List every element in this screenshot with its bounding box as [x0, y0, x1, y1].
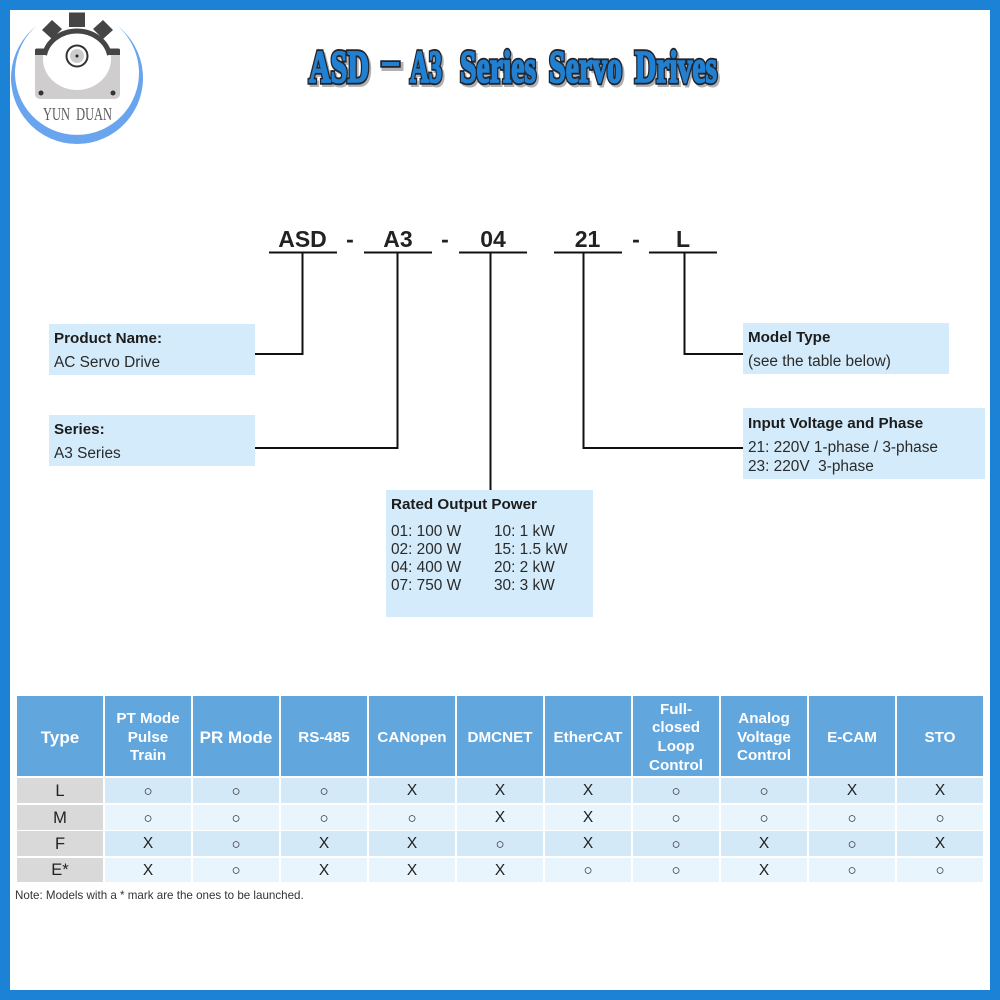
table: model type features: ○: [319, 810, 329, 826]
table: model type features: ○: [847, 836, 857, 852]
model code diagram: -: [346, 226, 354, 252]
table: model type features: Full-: [660, 701, 692, 718]
table: model type features: ○: [847, 810, 857, 826]
title: Series: [462, 44, 538, 94]
title: A3: [412, 44, 444, 94]
model code diagram: -: [441, 226, 449, 252]
table: model type features: X: [407, 782, 417, 799]
title: [307, 42, 720, 94]
panel: input voltage and phase: [743, 408, 985, 479]
table: model type features: PT Mode: [116, 710, 180, 727]
title: A3: [410, 42, 442, 92]
table: model type features: X: [319, 862, 329, 878]
title: A3: [410, 42, 442, 92]
table: model type features: ○: [759, 782, 769, 800]
table: model type features: X: [407, 835, 417, 852]
table: model type features: RS-485: [298, 729, 350, 746]
panel: model type: (see the table below): [748, 353, 891, 370]
model code diagram: 21: [575, 226, 600, 252]
title: ASD: [309, 42, 369, 92]
table: model type features: E-CAM: [827, 729, 877, 746]
table: model type features: X: [319, 835, 329, 852]
table: model type features: DMCNET: [468, 729, 532, 746]
note: Note: Models with a * mark are the ones to be launched.: [15, 889, 304, 902]
table: model type features: X: [495, 809, 505, 826]
table: model type features: [17, 696, 983, 882]
panel: rated output power: 02: 200 W: [391, 541, 461, 558]
table: model type features: ○: [671, 782, 681, 800]
title: ASD: [309, 42, 369, 92]
table: model type features: X: [759, 835, 769, 852]
table: model type features: PR Mode: [200, 728, 272, 747]
panel: model type: Model Type: [748, 329, 830, 346]
table: model type features: ○: [671, 836, 681, 852]
table: model type features: ○: [671, 810, 681, 826]
table: model type features: X: [583, 782, 593, 799]
table: model type features: M: [53, 808, 67, 826]
panel: rated output power: Rated Output Power: [391, 496, 537, 513]
title: Servo: [549, 42, 622, 92]
table: model type features: STO: [925, 729, 955, 746]
table: model type features: EtherCAT: [554, 729, 622, 746]
logo: YUN DUAN gear badge: YUN DUAN: [43, 104, 112, 124]
table: model type features: X: [495, 782, 505, 799]
table: model type features: ○: [231, 862, 241, 879]
table: model type features: ○: [231, 782, 241, 800]
panel: rated output power: 10: 1 kW: [494, 523, 555, 540]
table: model type features: ○: [143, 782, 153, 800]
panel: rated output power: 15: 1.5 kW: [494, 541, 568, 558]
panel: input voltage and phase: 21: 220V 1-phase / 3-phase: [748, 439, 938, 456]
model code diagram: ASD: [278, 226, 327, 252]
table: model type features: ○: [935, 862, 945, 879]
panel: series: A3 Series: [54, 445, 121, 462]
panel: rated output power: 01: 100 W: [391, 523, 461, 540]
model code diagram: -: [632, 226, 640, 252]
table: model type features: X: [583, 809, 593, 826]
table: model type features: ○: [671, 862, 681, 879]
panel: product name: Product Name:: [54, 330, 162, 347]
model code diagram: A3: [383, 226, 413, 252]
panel: input voltage and phase: 23: 220V 3-phase: [748, 458, 874, 475]
table: model type features: X: [143, 862, 153, 878]
panel: product name: AC Servo Drive: [54, 354, 160, 371]
model code diagram: 04: [480, 226, 506, 252]
panel: series: [49, 415, 255, 466]
table: model type features: X: [759, 862, 769, 878]
table: model type features: F: [55, 834, 65, 852]
panel: model type: [743, 323, 949, 374]
table: model type features: Voltage: [737, 729, 791, 746]
title: Series: [460, 42, 536, 92]
table: model type features: X: [495, 862, 505, 878]
table: model type features: E*: [51, 861, 69, 879]
title: Servo: [551, 44, 624, 94]
table: model type features: L: [55, 782, 65, 800]
table: model type features: Analog: [738, 710, 790, 727]
logo: YUN DUAN gear badge: [11, 12, 143, 144]
panel: series: Series:: [54, 421, 105, 438]
table: model type features: CANopen: [377, 729, 447, 746]
table: model type features: closed: [652, 719, 700, 736]
title: Series: [460, 42, 536, 92]
table: model type features: ○: [935, 810, 945, 826]
model code diagram: L: [676, 226, 690, 252]
table: model type features: Pulse: [128, 729, 168, 746]
title: ASD: [311, 44, 371, 94]
table: model type features: ○: [231, 810, 241, 826]
table: model type features: X: [935, 835, 945, 852]
table: model type features: X: [935, 782, 945, 799]
table: model type features: Control: [737, 747, 791, 764]
table: model type features: ○: [847, 862, 857, 879]
panel: rated output power: 30: 3 kW: [494, 577, 555, 594]
table: model type features: ○: [231, 836, 241, 852]
table: model type features: ○: [583, 862, 593, 879]
table: model type features: ○: [319, 782, 329, 800]
panel: rated output power: 20: 2 kW: [494, 559, 555, 576]
panel: rated output power: 04: 400 W: [391, 559, 461, 576]
table: model type features: Type: [41, 728, 79, 747]
table: model type features: Loop: [657, 738, 695, 755]
table: model type features: Train: [130, 747, 166, 764]
panel: rated output power: [386, 490, 593, 617]
panel: rated output power: 07: 750 W: [391, 577, 461, 594]
table: model type features: ○: [759, 810, 769, 826]
model code diagram: [255, 226, 743, 490]
table: model type features: X: [407, 862, 417, 878]
panel: product name: [49, 324, 255, 375]
table: model type features: X: [143, 835, 153, 852]
table: model type features: ○: [143, 810, 153, 826]
panel: input voltage and phase: Input Voltage and Phase: [748, 415, 923, 432]
table: model type features: X: [583, 835, 593, 852]
title: Servo: [549, 42, 622, 92]
table: model type features: ○: [495, 836, 505, 852]
table: model type features: Control: [649, 757, 703, 774]
table: model type features: ○: [407, 810, 417, 826]
table: model type features: X: [847, 782, 857, 799]
